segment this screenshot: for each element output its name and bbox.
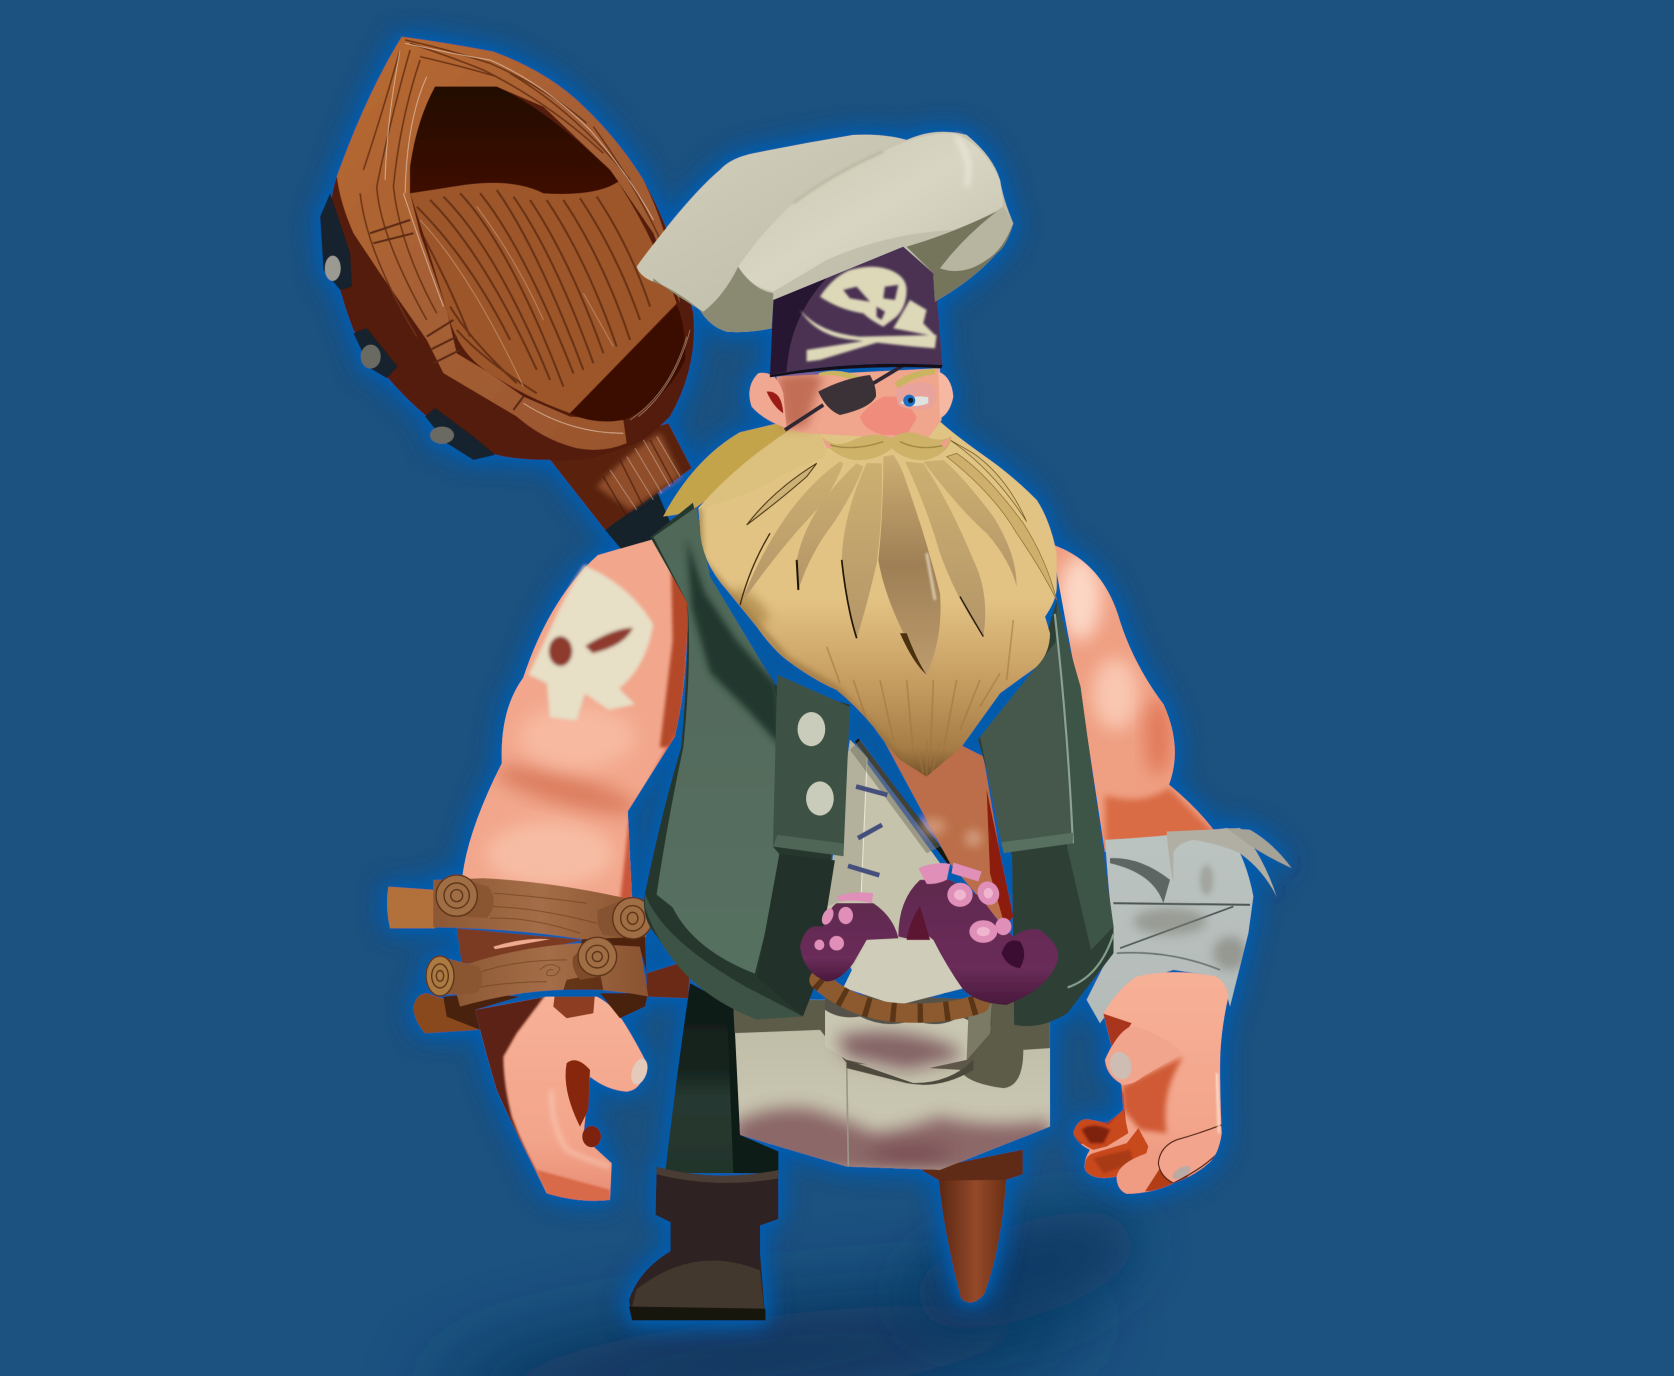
chef hat — [637, 132, 1013, 332]
spoon rear body — [330, 37, 694, 460]
spoon rivets — [320, 193, 495, 460]
vest left panel — [644, 503, 850, 1019]
right hand — [1070, 972, 1228, 1194]
octopus tentacles — [800, 863, 1058, 1005]
vest left lapel with buttons — [757, 675, 850, 1016]
leather strap — [858, 693, 1013, 930]
bandage claws — [1167, 828, 1277, 897]
left ear — [749, 373, 787, 428]
spoon inner shadow — [410, 87, 618, 194]
right ear — [938, 372, 953, 418]
skull and swords emblem — [800, 267, 937, 362]
rope belt — [819, 980, 980, 1013]
hair lock top left — [698, 422, 827, 508]
beard strands — [740, 440, 1057, 675]
upper plank — [433, 878, 647, 939]
spoon lower shadow — [570, 305, 685, 421]
spoon bowl — [410, 87, 677, 413]
thumb — [1105, 1026, 1183, 1085]
eye — [895, 382, 936, 409]
skull tattoo — [528, 566, 653, 721]
wood grain — [360, 40, 690, 433]
small tentacle — [800, 892, 898, 982]
peg leg — [921, 1150, 1023, 1303]
left arm — [461, 539, 694, 907]
stitches — [848, 787, 887, 875]
wooden spoon — [320, 37, 694, 560]
long hair — [663, 422, 801, 517]
shirt — [825, 740, 950, 973]
eyebrows — [818, 368, 935, 388]
wooden bracers — [387, 875, 690, 1033]
hat under shading — [653, 267, 773, 332]
spoon handle — [550, 423, 692, 560]
lower plank — [450, 943, 648, 1007]
beard mass — [698, 422, 1057, 777]
boot — [629, 1167, 778, 1320]
character — [320, 37, 1292, 1320]
illustration: pirate chef character on blue background — [305, 23, 1299, 1376]
face — [777, 368, 942, 440]
apron — [733, 1000, 1050, 1173]
head — [749, 363, 953, 440]
left hand — [470, 993, 650, 1203]
hat rear puff — [637, 132, 1013, 332]
rear sticks — [387, 887, 690, 1033]
eye patch — [785, 363, 907, 430]
right arm — [1052, 544, 1217, 852]
vest right panel — [978, 600, 1113, 1026]
nose — [860, 397, 917, 435]
mustache — [822, 432, 952, 460]
log ends — [426, 875, 653, 996]
ground shadow — [430, 1189, 1151, 1376]
spoon rim — [337, 37, 680, 450]
hat front fold — [738, 133, 1003, 292]
left leg and boot — [665, 983, 778, 1173]
beard — [698, 422, 1057, 777]
chef hat band — [770, 247, 943, 377]
large tentacle — [898, 863, 1058, 1005]
pocket top — [843, 939, 966, 1006]
apron pocket — [825, 993, 992, 1073]
bandage — [1087, 828, 1292, 1023]
